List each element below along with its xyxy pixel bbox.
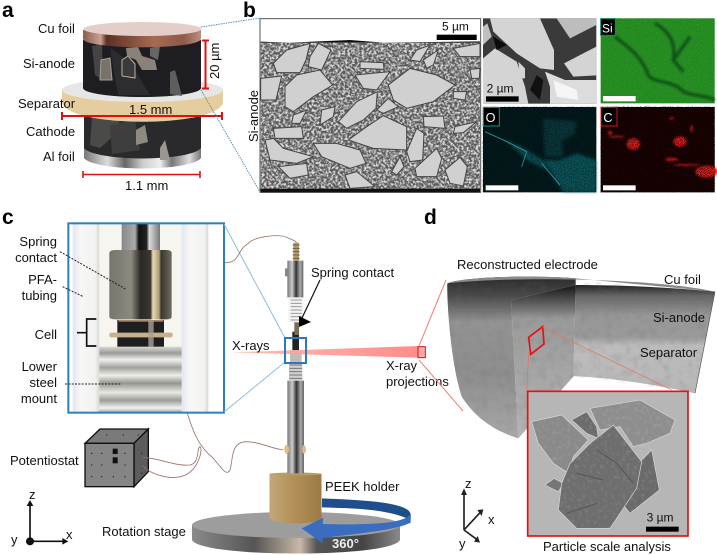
- xyz axes d: [461, 488, 483, 543]
- label potentiostat: Potentiostat: [10, 453, 79, 468]
- particle cluster: [532, 400, 675, 528]
- label X-ray projections: [386, 358, 449, 389]
- mottled texture: [513, 280, 697, 427]
- axis labels d: y: [459, 536, 466, 551]
- Si-anode layer: [83, 40, 201, 97]
- particle marker: [529, 327, 544, 354]
- label rotation stage: Rotation stage: [102, 524, 186, 539]
- axis labels c: x: [66, 527, 73, 542]
- layer labels: Si-anode: [23, 56, 75, 71]
- rotation arrow 360°: [302, 498, 411, 543]
- label X-rays: X-rays: [232, 338, 270, 353]
- projection connector lines: [419, 280, 463, 411]
- SEM cross-section: 5 µm: [442, 20, 469, 34]
- panel a: cell stack: [2, 0, 260, 193]
- cell bracket: [77, 319, 96, 346]
- panel c: tomography set-up: [2, 206, 449, 554]
- tall sample column: [284, 243, 306, 473]
- EDX map Si: Si: [602, 22, 613, 36]
- upper rod: [122, 224, 160, 251]
- label spring contact with pointer: Spring contact: [311, 265, 394, 280]
- inset labels: steel: [30, 375, 57, 390]
- inset labels: tubing: [22, 288, 57, 303]
- inset zoom connector lines: [224, 224, 285, 412]
- label X-ray projections: projections: [386, 374, 449, 389]
- layer labels: Al foil: [43, 149, 75, 164]
- label spring contact with pointer: [299, 265, 394, 327]
- axis labels d: [459, 476, 495, 551]
- potentiostat cube: [85, 429, 148, 487]
- wires: [143, 236, 297, 477]
- small blue selection box: [285, 338, 306, 363]
- particle surface texture: [539, 400, 672, 528]
- Cu foil: [83, 22, 202, 47]
- panel letter d: d: [424, 206, 437, 229]
- panel d: reconstructed volume: [419, 206, 717, 554]
- volume labels: Cu foil: [664, 272, 701, 287]
- particle inset: [527, 327, 688, 536]
- volume labels: Si-anode: [653, 310, 705, 325]
- EDX map Si: [601, 18, 715, 103]
- axis labels c: z: [29, 487, 36, 502]
- volume labels: Separator: [640, 345, 698, 360]
- lower steel mount: [99, 347, 182, 412]
- layer labels: Cu foil: [38, 21, 75, 36]
- EDX map C: C: [603, 111, 612, 125]
- dotted zoom lines: [201, 18, 260, 192]
- inset labels: contact: [15, 250, 57, 265]
- inset labels: Spring: [19, 234, 57, 249]
- SEM cross-section: [260, 19, 481, 192]
- axis labels c: [11, 487, 73, 547]
- scale bar 3 µm: [646, 527, 679, 532]
- dimension 20 µm: [202, 40, 222, 88]
- box outline: [68, 223, 224, 413]
- cathode layer and Al foil: [84, 112, 201, 168]
- dimension 20 µm: 20 µm: [207, 43, 222, 79]
- particle inset: 3 µm: [647, 510, 674, 524]
- label 360°: 360°: [332, 536, 359, 551]
- inset labels: Lower: [22, 359, 58, 374]
- layer labels: Cathode: [26, 124, 75, 139]
- dimension 1.1 mm: [83, 171, 200, 193]
- scale bar 2 µm: [486, 96, 519, 102]
- panel letter c: c: [2, 206, 14, 229]
- leader lines: [60, 252, 126, 384]
- EDX map C: [601, 107, 717, 192]
- layer labels: [18, 21, 76, 164]
- contact sleeve: [109, 250, 172, 319]
- dimension 1.5 mm: 1.5 mm: [129, 102, 172, 117]
- axis labels d: x: [488, 512, 495, 527]
- volume labels: Reconstructed electrode: [457, 257, 598, 272]
- inset magnified cell: [60, 223, 224, 413]
- rotated label Si-anode: Si-anode: [246, 90, 261, 142]
- dimension 1.5 mm: [62, 102, 222, 120]
- EDX map O: [483, 107, 596, 192]
- dimension 1.1 mm: 1.1 mm: [125, 178, 168, 193]
- layer labels: Separator: [18, 96, 76, 111]
- PEEK holder: [270, 472, 322, 523]
- volume labels: [457, 257, 705, 360]
- outer curved wall: [447, 277, 576, 438]
- x-ray beam: [232, 346, 425, 358]
- label PEEK holder: PEEK holder: [325, 479, 400, 494]
- xyz axes c: [26, 500, 68, 545]
- rotation stage: [192, 512, 400, 554]
- top rim: [447, 277, 715, 292]
- axis labels c: y: [11, 532, 18, 547]
- inset labels: Cell: [35, 327, 57, 342]
- panel b: SEM and EDX maps: [243, 0, 717, 192]
- reconstructed electrode volume: [443, 273, 717, 440]
- inset labels: mount: [21, 391, 57, 406]
- label X-ray projections: X-ray: [386, 358, 418, 373]
- SEM magnified detail: [483, 18, 596, 104]
- SEM magnified detail: 2 µm: [487, 81, 514, 95]
- label particle scale analysis: Particle scale analysis: [543, 539, 671, 554]
- right inner wall: [573, 285, 715, 393]
- mini cell: [117, 320, 164, 347]
- left cut wall: [511, 285, 576, 438]
- separator disc: [62, 78, 223, 122]
- EDX map O: O: [486, 111, 496, 125]
- inset labels: [15, 234, 58, 406]
- inset labels: PFA-: [28, 272, 57, 287]
- axis labels d: z: [465, 476, 472, 491]
- scale bar 5 µm: [437, 35, 477, 40]
